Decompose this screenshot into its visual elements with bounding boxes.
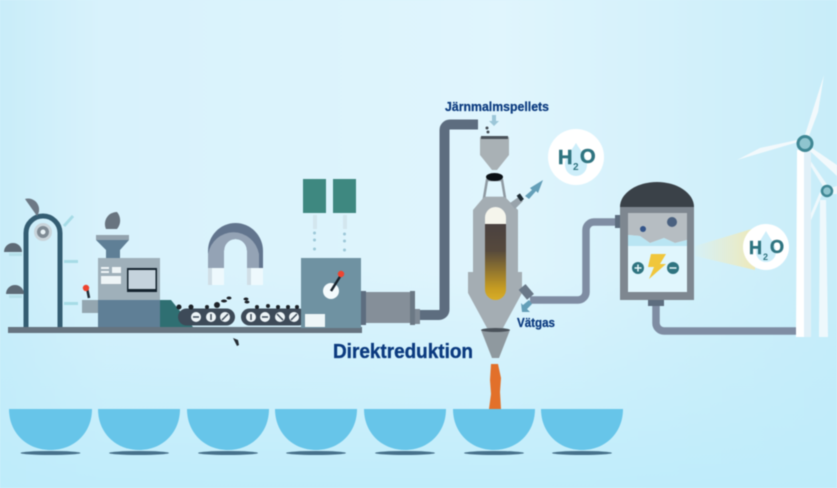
electrolyzer [620,182,694,300]
top hopper [480,126,509,170]
H2O badge top: 2 [573,162,579,173]
bottom hopper [481,328,510,358]
ribbed cylinder and pipe [361,124,478,325]
H2O badge top: H [558,147,572,169]
wind turbine rear [807,160,837,337]
H2O badge top: O [580,146,596,168]
bucket elevator [4,199,78,327]
row of bowls [9,409,623,455]
label: Järnmalmspellets: Järnmalmspellets [445,99,549,114]
wind turbine front [737,75,837,337]
water pipe to turbine [648,300,796,331]
green tanks with drips [303,179,356,252]
direct reduction unit [301,258,362,333]
H2O badge lower: H [749,238,762,258]
label: Direktreduktion: Direktreduktion [333,341,473,363]
hydrogen pipe [519,215,620,300]
conveyor belts with pellets [176,296,307,346]
H2O badge lower: O [770,237,784,257]
light beam [695,228,755,270]
furnace shaft [468,173,524,328]
arrow: hydrogen in [521,300,532,312]
arrow: steam out [525,180,543,199]
molten iron stream [489,364,501,409]
base rail [8,327,362,333]
H2O badge top [548,129,604,185]
arrow: pellets in [489,115,499,126]
label: Vätgas: Vätgas [517,316,555,330]
magnet [208,223,263,285]
H2O badge lower [743,224,789,270]
H2O badge lower: 2 [763,252,768,262]
ore crushing machine [82,212,193,327]
